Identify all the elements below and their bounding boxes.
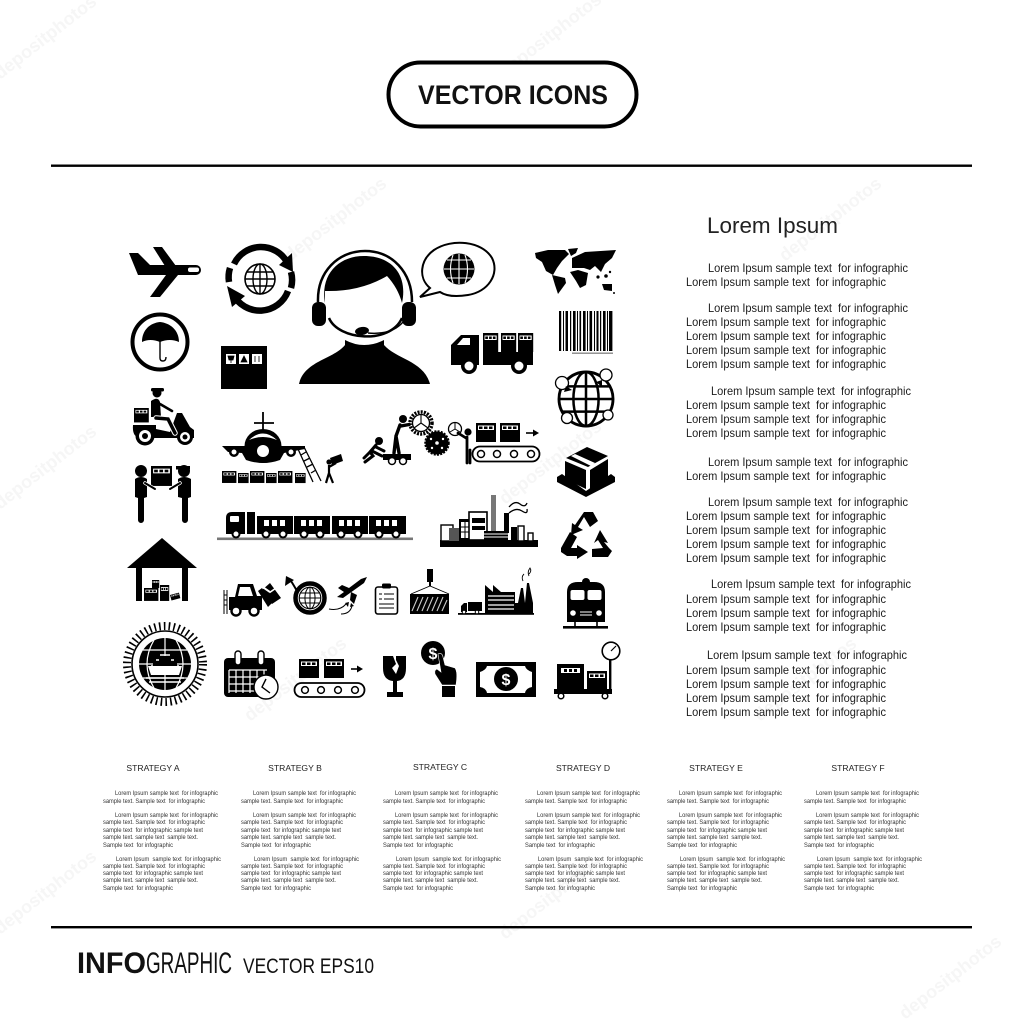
text column: right: Lorem Ipsum sample text for infographic [708, 302, 908, 315]
icon: warehouse [127, 538, 197, 601]
icon: crane lifting container [410, 569, 449, 614]
icon: weighing scale cart [554, 642, 620, 699]
icon: call center agent [299, 251, 430, 384]
strategy A column: Sample text for infographic [103, 885, 173, 892]
strategy D column: Lorem Ipsum sample text for infographic [537, 790, 640, 797]
strategy D column: Lorem Ipsum sample text for infographic [538, 856, 643, 863]
icon: conveyor belt with boxes [294, 659, 364, 697]
icon: banknote: $ [502, 672, 511, 689]
strategy E column: Sample text for infographic [667, 885, 737, 892]
icon: hand pressing dollar coin [421, 641, 457, 697]
strategy F column: Lorem Ipsum sample text for infographic [817, 856, 922, 863]
strategy F column: Sample text for infographic [804, 885, 874, 892]
strategy D column: STRATEGY D [556, 763, 610, 773]
strategy E column: sample text for infographic sample text [667, 827, 767, 834]
strategy F column: Lorem Ipsum sample text for infographic [816, 790, 919, 797]
strategy B column: Lorem Ipsum sample text for infographic [253, 790, 356, 797]
strategy C column: sample text. Sample text for infographic [383, 863, 485, 870]
icon: airplane [129, 247, 201, 297]
icon: hand pressing dollar coin: $ [429, 646, 438, 663]
strategy D column: Sample text for infographic [525, 885, 595, 892]
strategy C column: Lorem Ipsum sample text for infographic [396, 856, 501, 863]
strategy A column: Lorem Ipsum sample text for infographic [115, 812, 218, 819]
strategy C column: STRATEGY C [413, 762, 467, 772]
text column: right: Lorem Ipsum sample text for infographic [686, 330, 886, 343]
strategy B column: sample text. sample text sample text. [241, 877, 336, 884]
strategy E column: sample text. Sample text for infographic [667, 819, 769, 826]
strategy A column: Lorem Ipsum sample text for infographic [115, 790, 218, 797]
strategy D column: sample text. sample text sample text. [525, 834, 620, 841]
strategy A column: Sample text for infographic [103, 842, 173, 849]
strategy A column: sample text. Sample text for infographic [103, 798, 205, 805]
watermark: depositphotos [495, 416, 605, 508]
strategy F column: STRATEGY F [831, 763, 885, 773]
icon: barcode [559, 311, 613, 354]
strategy D column [525, 763, 643, 892]
strategy C column: Sample text for infographic [383, 885, 453, 892]
text column: right: Lorem Ipsum sample text for infographic [686, 607, 886, 620]
strategy A column: sample text. sample text sample text. [103, 877, 198, 884]
text column: right: Lorem Ipsum sample text for infographic [686, 678, 886, 691]
strategy E column: STRATEGY E [689, 763, 743, 773]
strategy D column: sample text for infographic sample text [525, 827, 625, 834]
text column: right: Lorem Ipsum sample text for infographic [686, 593, 886, 606]
strategy D column: sample text. sample text sample text. [525, 877, 620, 884]
icon: two people handing over box [135, 465, 191, 523]
footer label [77, 947, 374, 980]
icon: workers with gears and conveyor [364, 412, 540, 464]
strategy E column: sample text. sample text sample text. [667, 834, 762, 841]
icon: banknote [476, 662, 536, 697]
icon: train front view [563, 578, 608, 629]
strategy A column: sample text. sample text sample text. [103, 834, 198, 841]
text column: right: Lorem Ipsum sample text for infographic [686, 538, 886, 551]
strategy A column: sample text for infographic sample text [103, 827, 203, 834]
strategy E column: sample text. Sample text for infographic [667, 863, 769, 870]
text column: right: Lorem Ipsum sample text for infographic [686, 664, 886, 677]
strategy F column: sample text for infographic sample text [804, 870, 904, 877]
strategy C column: Sample text for infographic [383, 842, 453, 849]
heading: Lorem Ipsum: Lorem Ipsum [707, 213, 838, 238]
text column: right: Lorem Ipsum sample text for infographic [686, 316, 886, 329]
strategy A column: STRATEGY A [126, 763, 180, 773]
strategy A column: Lorem Ipsum sample text for infographic [116, 856, 221, 863]
strategy B column: Lorem Ipsum sample text for infographic [253, 812, 356, 819]
strategy F column: sample text. Sample text for infographic [804, 819, 906, 826]
watermark: depositphotos [750, 633, 860, 725]
text column: right: Lorem Ipsum sample text for infographic [686, 510, 886, 523]
strategy E column: Lorem Ipsum sample text for infographic [679, 790, 782, 797]
text column: right: Lorem Ipsum sample text for infographic [686, 524, 886, 537]
strategy E column: sample text. sample text sample text. [667, 877, 762, 884]
icon: front view airplane with cargo [222, 412, 343, 483]
text column: right: Lorem Ipsum sample text for infographic [686, 399, 886, 412]
text column: right: Lorem Ipsum sample text for infographic [686, 427, 886, 440]
icon: delivery truck with boxes [451, 333, 533, 374]
icon: package box [221, 346, 267, 389]
strategy B column: Sample text for infographic [241, 885, 311, 892]
watermark: depositphotos [895, 931, 1005, 1023]
strategy E column [667, 763, 785, 892]
strategy E column: sample text. Sample text for infographic [667, 798, 769, 805]
strategy F column: sample text for infographic sample text [804, 827, 904, 834]
strategy D column: sample text. Sample text for infographic [525, 798, 627, 805]
strategy B column: Lorem Ipsum sample text for infographic [254, 856, 359, 863]
strategy F column: Sample text for infographic [804, 842, 874, 849]
icon: clipboard checklist [376, 584, 398, 614]
icon: umbrella in circle [132, 314, 188, 370]
strategy F column [804, 763, 922, 892]
strategy E column: Sample text for infographic [667, 842, 737, 849]
strategy C column: sample text. Sample text for infographic [383, 819, 485, 826]
icon: industrial city [440, 495, 538, 547]
strategy F column: sample text. Sample text for infographic [804, 863, 906, 870]
footer label: GRAPHIC [146, 947, 232, 980]
footer label: INFO [77, 947, 146, 980]
watermark: depositphotos [280, 173, 390, 265]
strategy B column: sample text. Sample text for infographic [241, 798, 343, 805]
text column: right: Lorem Ipsum sample text for infographic [686, 470, 886, 483]
strategy A column: sample text for infographic sample text [103, 870, 203, 877]
text column: right: Lorem Ipsum sample text for infographic [708, 496, 908, 509]
strategy C column: sample text. sample text sample text. [383, 834, 478, 841]
text column: right: Lorem Ipsum sample text for infographic [711, 385, 911, 398]
icon grid [127, 243, 620, 702]
icon: calendar with clock [224, 651, 278, 699]
strategy F column: sample text. Sample text for infographic [804, 798, 906, 805]
text column: right: Lorem Ipsum sample text for infographic [686, 413, 886, 426]
strategy B column [241, 763, 359, 892]
strategy A column: sample text. Sample text for infographic [103, 863, 205, 870]
text column: right: Lorem Ipsum sample text for infographic [686, 358, 886, 371]
strategy B column: sample text for infographic sample text [241, 827, 341, 834]
strategy C column: sample text for infographic sample text [383, 827, 483, 834]
icon: globe with ship and sun rays [127, 626, 203, 702]
strategy B column: sample text. Sample text for infographic [241, 863, 343, 870]
text column: right: Lorem Ipsum sample text for infographic [686, 344, 886, 357]
strategy E column: Lorem Ipsum sample text for infographic [679, 812, 782, 819]
strategy F column: Lorem Ipsum sample text for infographic [816, 812, 919, 819]
bottom rule [51, 926, 972, 928]
text column: right: Lorem Ipsum sample text for infographic [708, 456, 908, 469]
footer label: VECTOR EPS10 [243, 955, 374, 978]
strategy A column: sample text. Sample text for infographic [103, 819, 205, 826]
strategy D column: Sample text for infographic [525, 842, 595, 849]
strategy C column: Lorem Ipsum sample text for infographic [395, 790, 498, 797]
icon: globe with circular arrows [227, 247, 293, 311]
icon: fragile glass [383, 656, 406, 697]
strategy B column: sample text. sample text sample text. [241, 834, 336, 841]
icon: speech bubble with globe [420, 243, 495, 297]
watermark: depositphotos [240, 633, 350, 725]
text column: right: Lorem Ipsum sample text for infographic [686, 621, 886, 634]
icon: freight train [217, 512, 413, 540]
strategy B column: sample text for infographic sample text [241, 870, 341, 877]
strategy B column: Sample text for infographic [241, 842, 311, 849]
icon: departing plane [329, 577, 367, 614]
strategy C column: Lorem Ipsum sample text for infographic [395, 812, 498, 819]
strategy C column: sample text. Sample text for infographic [383, 798, 485, 805]
icon: globe with network nodes [556, 369, 613, 426]
strategy F column: sample text. sample text sample text. [804, 834, 899, 841]
text column: right: Lorem Ipsum sample text for infographic [686, 706, 886, 719]
text column: right: Lorem Ipsum sample text for infographic [686, 692, 886, 705]
text column: right [686, 262, 911, 719]
strategy D column: sample text. Sample text for infographic [525, 863, 627, 870]
strategy C column [383, 762, 501, 892]
title badge: VECTOR ICONS [418, 80, 608, 110]
watermark: depositphotos [775, 173, 885, 265]
strategy E column: sample text for infographic sample text [667, 870, 767, 877]
icon: forklift [224, 583, 281, 616]
strategy D column: sample text for infographic sample text [525, 870, 625, 877]
title badge [388, 62, 636, 126]
strategy F column: sample text. sample text sample text. [804, 877, 899, 884]
strategy B column: sample text. Sample text for infographic [241, 819, 343, 826]
icon: scooter courier [133, 388, 194, 446]
text column: right: Lorem Ipsum sample text for infographic [686, 552, 886, 565]
icon: world map [535, 248, 616, 294]
strategy D column: sample text. Sample text for infographic [525, 819, 627, 826]
text column: right: Lorem Ipsum sample text for infographic [686, 276, 886, 289]
strategy B column: STRATEGY B [268, 763, 322, 773]
icon: recycle symbol [561, 512, 612, 559]
text column: right: Lorem Ipsum sample text for infographic [711, 578, 911, 591]
icon: globe with curved arrow [285, 576, 324, 612]
strategy E column: Lorem Ipsum sample text for infographic [680, 856, 785, 863]
strategy C column: sample text for infographic sample text [383, 870, 483, 877]
strategy C column: sample text. sample text sample text. [383, 877, 478, 884]
top rule [51, 164, 972, 167]
text column: right: Lorem Ipsum sample text for infographic [708, 262, 908, 275]
icon: truck and factory [458, 568, 534, 615]
icon: box on pallet [557, 447, 615, 497]
text column: right: Lorem Ipsum sample text for infographic [707, 649, 907, 662]
watermark: depositphotos [495, 851, 605, 943]
strategy A column [103, 763, 221, 892]
strategy D column: Lorem Ipsum sample text for infographic [537, 812, 640, 819]
